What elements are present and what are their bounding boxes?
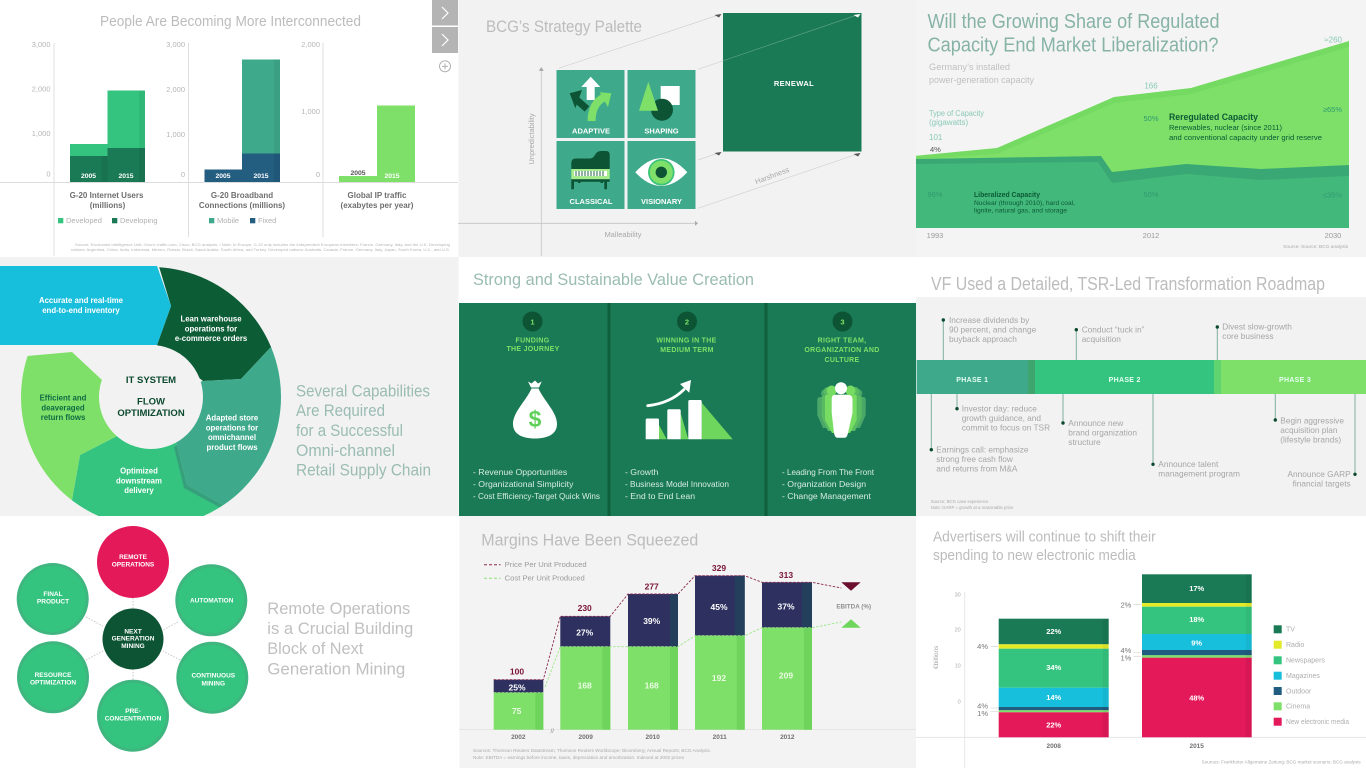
cost labels: 168 xyxy=(578,681,592,691)
x axis years xyxy=(927,231,1341,240)
milestone labels: commit to focus on TSR xyxy=(962,423,1050,433)
column 1: funding the journey: 1 xyxy=(530,318,535,326)
legend: Price Per Unit Produced xyxy=(505,560,587,569)
panel: regulated capacity area chart xyxy=(916,0,1366,257)
hub text xyxy=(117,375,185,419)
chart: G-20 broadband connections xyxy=(166,40,285,225)
segment text: warehouse xyxy=(175,314,248,343)
year labels: 2009 xyxy=(578,734,593,741)
node: final product: PRODUCT xyxy=(37,598,69,605)
margin labels: 25% xyxy=(508,682,526,692)
column 2: winning in the medium term: - End to End Lean xyxy=(625,491,695,501)
segment text: store xyxy=(206,414,259,452)
cost labels xyxy=(512,671,793,716)
side heading: Generation Mining xyxy=(267,659,405,678)
footnote xyxy=(71,242,450,252)
icon: growth chart xyxy=(646,380,733,439)
chart: G-20 internet users: G-20 Internet Users xyxy=(70,191,144,200)
panel: omni-channel wheel xyxy=(0,257,458,530)
panel: strategy palette xyxy=(458,0,916,257)
area chart: 166 xyxy=(1144,82,1158,90)
milestone labels xyxy=(936,315,1351,489)
bar 2015: 18% xyxy=(1189,615,1205,624)
total labels: 100 xyxy=(510,666,524,676)
segment text: delivery: downstream xyxy=(116,476,162,486)
legend: Cost Per Unit Produced xyxy=(505,574,585,583)
milestone labels: buyback approach xyxy=(949,334,1017,344)
milestone labels: 90 percent, and change xyxy=(949,324,1037,334)
stacked bars xyxy=(494,576,812,730)
chart: G-20 internet users: Developing xyxy=(120,216,158,225)
segment: inventory xyxy=(0,266,171,345)
segment text: delivery: Optimized xyxy=(120,466,158,476)
bar 2015: 48% xyxy=(1189,693,1205,702)
timeline band: PHASE 1 xyxy=(956,377,988,384)
label: reregulated capacity: and conventional capacity under grid reserve xyxy=(1169,133,1322,142)
bar 2015: 2% xyxy=(1120,600,1132,609)
chart: global IP traffic: 2015 xyxy=(384,173,400,180)
bar 2008: 22% xyxy=(1046,720,1062,730)
chart: G-20 internet users xyxy=(32,40,158,225)
title: Capacity End Market Liberalization? xyxy=(928,34,1218,57)
bar 2015 xyxy=(1120,574,1252,737)
side heading: Are Required xyxy=(296,402,385,420)
x axis years: 2030 xyxy=(1325,231,1341,240)
segment text: store: product flows xyxy=(206,443,258,452)
side heading: Retail Supply Chain xyxy=(296,462,431,480)
chart: global IP traffic: (exabytes per year) xyxy=(341,201,414,210)
milestone labels: Announce GARP xyxy=(1288,469,1351,479)
title: People Are Becoming More Interconnected xyxy=(100,13,361,30)
milestone labels: Announce talent xyxy=(1158,459,1219,469)
side heading: for a Successful xyxy=(296,422,403,440)
side heading: Block of Next xyxy=(267,639,364,658)
segment text: inventory: end-to-end inventory xyxy=(42,306,120,315)
chart: G-20 broadband connections: Connections (millions) xyxy=(199,201,285,210)
area chart: 96% xyxy=(927,190,943,199)
chart: global IP traffic: 2005 xyxy=(350,170,366,177)
total labels: 329 xyxy=(712,563,726,573)
area chart: ≈260 xyxy=(1324,36,1343,44)
total labels: 277 xyxy=(645,582,659,592)
year labels: 2010 xyxy=(645,734,660,741)
legend: Magazines xyxy=(1286,673,1320,680)
EBITDA indicators: EBITDA (%) xyxy=(836,604,871,610)
node: final product: FINAL xyxy=(43,591,63,598)
column 3: right team xyxy=(782,312,880,501)
year labels: 2008 xyxy=(1046,743,1061,750)
column 3: right team: RIGHT TEAM, xyxy=(818,338,866,344)
milestone labels: Earnings call: emphasize xyxy=(936,444,1029,454)
node: pre-concentration: PRE- xyxy=(125,708,141,715)
year labels: 2015 xyxy=(1189,743,1204,750)
area chart: ≥65% xyxy=(1323,105,1342,114)
chart: global IP traffic: 1,000 xyxy=(301,107,320,116)
chart: global IP traffic: 2,000 xyxy=(301,40,320,49)
year labels: 2002 xyxy=(511,734,526,741)
segment: lean warehouse xyxy=(157,267,272,381)
subtitle xyxy=(929,62,1034,85)
panel: strategy palette: Harshness xyxy=(754,165,791,186)
chart: G-20 internet users: 2015 xyxy=(118,173,134,180)
area chart: Type of Capacity xyxy=(929,109,984,118)
node: next generation mining: NEXT xyxy=(124,628,142,635)
x axis years: 2012 xyxy=(1143,231,1159,240)
column 1: funding the journey: - Revenue Opportunities xyxy=(473,467,568,477)
node: next generation mining: MINING xyxy=(121,643,145,650)
chart: global IP traffic: Global IP traffic xyxy=(348,191,407,200)
label: liberalized capacity xyxy=(974,192,1075,214)
bar 2008 xyxy=(977,619,1109,737)
milestone labels: Divest slow-growth xyxy=(1222,322,1292,332)
margin labels: 27% xyxy=(576,628,594,638)
chart: G-20 broadband connections: 3,000 xyxy=(166,40,185,49)
area chart: ≤35% xyxy=(1323,190,1342,200)
side heading: Several Capabilities xyxy=(296,382,430,400)
side heading xyxy=(267,599,413,678)
milestone labels: management program xyxy=(1158,469,1240,479)
timeline band: PHASE 3 xyxy=(1279,377,1311,384)
node: next generation mining: GENERATION xyxy=(112,636,155,643)
segment text: inventory: Accurate and real-time xyxy=(39,296,124,305)
column 3: right team: CULTURE xyxy=(824,357,860,364)
cost line xyxy=(494,622,841,693)
legend: Cinema xyxy=(1286,704,1310,711)
milestone labels: brand organization xyxy=(1068,428,1137,438)
panel: next generation mining xyxy=(0,516,458,768)
panel: TSR-led roadmap xyxy=(916,257,1366,516)
chart: G-20 broadband connections: 2,000 xyxy=(166,85,185,94)
side heading: is a Crucial Building xyxy=(267,619,413,638)
y axis: 0 xyxy=(958,700,961,706)
milestone labels: structure xyxy=(1068,437,1101,447)
milestone labels: (lifestyle brands) xyxy=(1280,435,1341,445)
nav button: next 2 xyxy=(432,27,458,53)
node: pre-concentration: CONCENTRATION xyxy=(105,715,162,722)
label: reregulated capacity: Renewables, nuclear (since 2011) xyxy=(1169,123,1282,132)
panel: value creation xyxy=(458,257,916,516)
milestone labels: core business xyxy=(1222,331,1274,341)
node: continuous mining: MINING xyxy=(202,680,225,687)
legend: Newspapers xyxy=(1286,658,1325,665)
title: Advertisers will continue to shift their xyxy=(933,529,1156,546)
margin labels: 45% xyxy=(710,602,728,612)
node: resource optimization xyxy=(17,641,89,713)
node: continuous mining xyxy=(176,642,248,714)
segment text: warehouse: e-commerce orders xyxy=(175,334,248,343)
bar 2015: 4% xyxy=(1120,646,1132,655)
title: BCG’s Strategy Palette xyxy=(486,18,642,36)
panel: strategy palette: Unpredictability xyxy=(527,113,536,165)
milestone labels: Conduct “tuck in” xyxy=(1082,324,1145,334)
y axis: 20 xyxy=(955,628,961,634)
panel: strategy palette: Malleability xyxy=(604,230,642,239)
column 3: right team: ORGANIZATION AND xyxy=(804,347,880,354)
node: resource optimization: RESOURCE xyxy=(35,672,72,679)
segment text: store: operations for xyxy=(206,424,258,432)
node: automation: AUTOMATION xyxy=(190,598,234,605)
segment text: store: Adapted store xyxy=(206,414,259,422)
bar 2008: 34% xyxy=(1046,663,1062,672)
label: liberalized capacity: Nuclear (through 2010), hard coal, xyxy=(974,200,1075,207)
chart: global IP traffic xyxy=(301,40,415,210)
chart: G-20 internet users: (millions) xyxy=(90,201,126,210)
column 2: winning in the medium term: - Business Model Innovation xyxy=(625,479,729,489)
footnote xyxy=(473,748,711,760)
tile: visionary: VISIONARY xyxy=(641,197,682,206)
footnote xyxy=(931,499,1014,510)
milestone labels: Investor day: reduce xyxy=(962,404,1037,414)
label: liberalized capacity: lignite, natural gas, and storage xyxy=(974,208,1067,214)
chart: G-20 broadband connections: G-20 Broadband xyxy=(211,191,273,200)
title: Strong and Sustainable Value Creation xyxy=(473,270,754,289)
cost labels: 75 xyxy=(512,706,522,716)
bar 2015: 1% xyxy=(1120,654,1132,663)
icon: plus xyxy=(440,61,450,72)
title xyxy=(928,10,1220,57)
footnote: Sources: Thomson Reuters Datastream; Thomson Reuters Worldscope; Bloomberg; Annual Reports; BCG Analysis. xyxy=(473,748,711,753)
legend: TV xyxy=(1286,626,1295,634)
node: continuous mining: CONTINUOUS xyxy=(191,673,236,680)
footnote: Note: GARP = growth at a reasonable price xyxy=(931,505,1014,510)
year labels: 2011 xyxy=(713,734,727,741)
hub text: OPTIMIZATION xyxy=(117,408,185,419)
column 2: winning in the medium term: WINNING IN THE xyxy=(656,338,717,344)
column 2: winning in the medium term: MEDIUM TERM xyxy=(660,347,714,354)
node: remote operations: REMOTE xyxy=(119,554,148,561)
segment: downstream delivery xyxy=(72,436,224,516)
chart: G-20 internet users: 2,000 xyxy=(32,84,50,94)
chart: G-20 broadband connections: 2005 xyxy=(215,173,231,180)
renewal square: RENEWAL xyxy=(774,79,814,88)
area chart: 50% xyxy=(1143,114,1159,123)
icon: people xyxy=(817,382,866,438)
total labels xyxy=(510,563,793,676)
column 2: winning in the medium term: - Growth xyxy=(625,467,658,477)
milestone labels: Announce new xyxy=(1068,418,1124,428)
chart: G-20 internet users: Developed xyxy=(66,216,102,225)
bar 2008: 14% xyxy=(1046,693,1062,702)
column 1: funding the journey xyxy=(473,312,601,501)
segment text: returns xyxy=(40,394,87,422)
side heading: Omni-channel xyxy=(296,442,395,460)
column 3: right team: 3 xyxy=(840,318,845,326)
milestone labels: Begin aggressive xyxy=(1280,416,1344,426)
bar 2015: 9% xyxy=(1191,639,1202,648)
footnote: nations: Argentina, China, India, Indonesia, Mexico, Russia, Brazil, Saudi Arabia, South Africa, and Turkey. Developed nations: Australia, Canada, France, Germany, Italy, Japan, South Korea, U.K., and U.S. xyxy=(71,247,450,252)
title xyxy=(933,529,1156,564)
segment text: returns: return flows xyxy=(41,413,86,422)
chart: G-20 broadband connections: Fixed xyxy=(258,216,276,225)
wheel diagram xyxy=(0,266,281,516)
column 1: funding the journey: - Organizational Simplicity xyxy=(473,479,574,489)
column 3: right team: - Organization Design xyxy=(782,479,866,489)
y axis: 10 xyxy=(955,664,961,670)
segment text: delivery xyxy=(116,466,162,495)
panel: margins squeezed: // xyxy=(550,728,554,735)
price line xyxy=(494,576,841,680)
milestone labels: acquisition plan xyxy=(1280,425,1338,435)
chart: G-20 internet users: 2005 xyxy=(81,173,96,180)
node: next generation mining xyxy=(102,608,164,670)
subtitle: Germany’s installed xyxy=(929,62,1010,72)
tile: visionary xyxy=(628,141,696,209)
renewal square xyxy=(723,13,862,152)
column 2: winning in the medium term xyxy=(625,312,733,501)
bar 2015: 17% xyxy=(1189,584,1205,593)
column 1: funding the journey: THE JOURNEY xyxy=(506,346,560,353)
tile: classical xyxy=(556,141,624,209)
source: Sources: Frankfurter Allgemeine Zeitung; BCG market scenario; BCG analysis xyxy=(1202,760,1361,764)
segment text: returns: deaveraged xyxy=(41,404,85,412)
year labels xyxy=(1046,743,1204,750)
tile: shaping xyxy=(628,70,696,138)
hub text: FLOW xyxy=(137,396,165,408)
segment: return flows xyxy=(21,352,117,500)
chart: G-20 internet users: 0 xyxy=(46,170,50,178)
node: remote operations xyxy=(97,526,169,598)
column 2: winning in the medium term: 2 xyxy=(685,318,689,326)
legend xyxy=(484,560,587,583)
milestone labels: Increase dividends by xyxy=(949,315,1030,325)
legend: New electronic media xyxy=(1286,719,1349,726)
segment text: warehouse: Lean warehouse xyxy=(180,314,242,324)
tile: shaping: SHAPING xyxy=(644,126,679,136)
node: resource optimization: OPTIMIZATION xyxy=(30,680,76,687)
legend: Radio xyxy=(1286,642,1304,649)
segment text: warehouse: operations for xyxy=(185,324,237,334)
y axis xyxy=(933,592,961,706)
segment text: returns: Efficient and xyxy=(40,394,87,402)
milestone labels: acquisition xyxy=(1082,334,1121,344)
EBITDA indicators xyxy=(836,582,871,628)
node: automation xyxy=(175,564,247,636)
y axis: €billions xyxy=(933,645,940,669)
margin labels: 39% xyxy=(643,616,661,626)
hub text: IT SYSTEM xyxy=(126,375,176,386)
perspective arrows xyxy=(559,14,860,208)
column 3: right team: - Leading From The Front xyxy=(782,467,875,477)
bar 2008: 4% xyxy=(977,702,988,710)
panel: margins squeezed xyxy=(459,516,916,768)
total labels: 230 xyxy=(578,603,592,613)
margin labels xyxy=(508,602,795,692)
area chart xyxy=(916,36,1349,228)
milestone labels: financial targets xyxy=(1293,479,1351,489)
chart: G-20 broadband connections: 0 xyxy=(181,170,185,179)
milestone dots xyxy=(930,318,1357,476)
chart: G-20 internet users: 3,000 xyxy=(32,40,50,49)
column 1: funding the journey: - Cost Efficiency-Target Quick Wins xyxy=(473,491,601,501)
label: reregulated capacity xyxy=(1169,112,1322,142)
footnote: Source: BCG case experience xyxy=(931,499,989,504)
node: pre-concentration xyxy=(97,680,169,752)
timeline band xyxy=(917,360,1366,394)
hub circle xyxy=(99,345,203,449)
segment text: delivery: delivery xyxy=(124,486,154,495)
source: Source: Source: BCG analysis xyxy=(1283,244,1349,250)
cost labels: 192 xyxy=(712,673,726,683)
x axis years: 1993 xyxy=(927,231,943,240)
label: reregulated capacity: Reregulated Capacity xyxy=(1169,112,1258,122)
node: remote operations: OPERATIONS xyxy=(112,561,155,568)
tile: adaptive: ADAPTIVE xyxy=(572,126,610,136)
year labels: 2012 xyxy=(780,734,795,741)
tile: adaptive xyxy=(556,70,624,138)
chart: G-20 broadband connections: 2015 xyxy=(253,173,269,180)
subtitle: power-generation capacity xyxy=(929,75,1034,85)
cost labels: 168 xyxy=(645,681,659,691)
footnote: Source: Economist Intelligence Unit; Ovum; traffic.com; Cisco; BCG analysis. / Note: In Europe, G-20 only includes the independent European members: France, Germany, Italy, and the U.K. Developing xyxy=(75,242,450,247)
footnote: Note: EBITDA = earnings before income, taxes, depreciation and amortization. Indexed at 2002 prices xyxy=(473,755,685,760)
side heading xyxy=(296,382,431,480)
title: Will the Growing Share of Regulated xyxy=(928,10,1220,33)
milestone labels: and returns from M&A xyxy=(936,464,1018,474)
chart: G-20 broadband connections: Mobile xyxy=(217,216,239,225)
area chart: 50% xyxy=(1143,190,1159,199)
bar 2008: 4% xyxy=(977,642,988,651)
area chart: 101 xyxy=(929,133,943,142)
icon: money bag: $ xyxy=(529,406,542,432)
title: spending to new electronic media xyxy=(933,547,1136,564)
segment: store operations xyxy=(176,347,281,505)
legend: Outdoor xyxy=(1286,688,1312,695)
nav button: next xyxy=(432,0,458,26)
axes xyxy=(458,70,695,256)
milestone labels: strong free cash flow xyxy=(936,454,1014,464)
legend xyxy=(1274,625,1349,726)
chart: global IP traffic: 0 xyxy=(316,170,320,179)
icon: money bag xyxy=(513,380,557,438)
side heading: Remote Operations xyxy=(267,599,410,618)
cost labels: 209 xyxy=(779,671,793,681)
chart: G-20 broadband connections: 1,000 xyxy=(166,130,185,139)
chart: G-20 internet users: 1,000 xyxy=(32,129,50,138)
panel: advertisers shift xyxy=(916,516,1366,768)
bar 2008: 1% xyxy=(977,709,988,718)
column 3: right team: - Change Management xyxy=(782,491,871,501)
y axis: 30 xyxy=(955,592,961,598)
node: final product xyxy=(17,563,89,635)
milestone labels: growth guidance, and xyxy=(962,413,1041,423)
timeline band: PHASE 2 xyxy=(1109,377,1141,384)
total labels: 313 xyxy=(779,570,793,580)
column 1: funding the journey: FUNDING xyxy=(516,338,550,344)
margin labels: 37% xyxy=(777,602,795,612)
panel: people are becoming more interconnected xyxy=(0,0,458,257)
area chart: 4% xyxy=(930,145,941,154)
segment text: inventory xyxy=(39,296,124,315)
connector stems xyxy=(931,320,1355,474)
title: Margins Have Been Squeezed xyxy=(481,531,698,550)
segment text: store: omnichannel xyxy=(208,433,256,442)
year labels xyxy=(511,734,795,741)
bar 2008: 22% xyxy=(1046,627,1062,636)
label: liberalized capacity: Liberalized Capacity xyxy=(974,192,1040,199)
area chart: (gigawatts) xyxy=(929,118,968,127)
tile: classical: CLASSICAL xyxy=(570,197,613,206)
